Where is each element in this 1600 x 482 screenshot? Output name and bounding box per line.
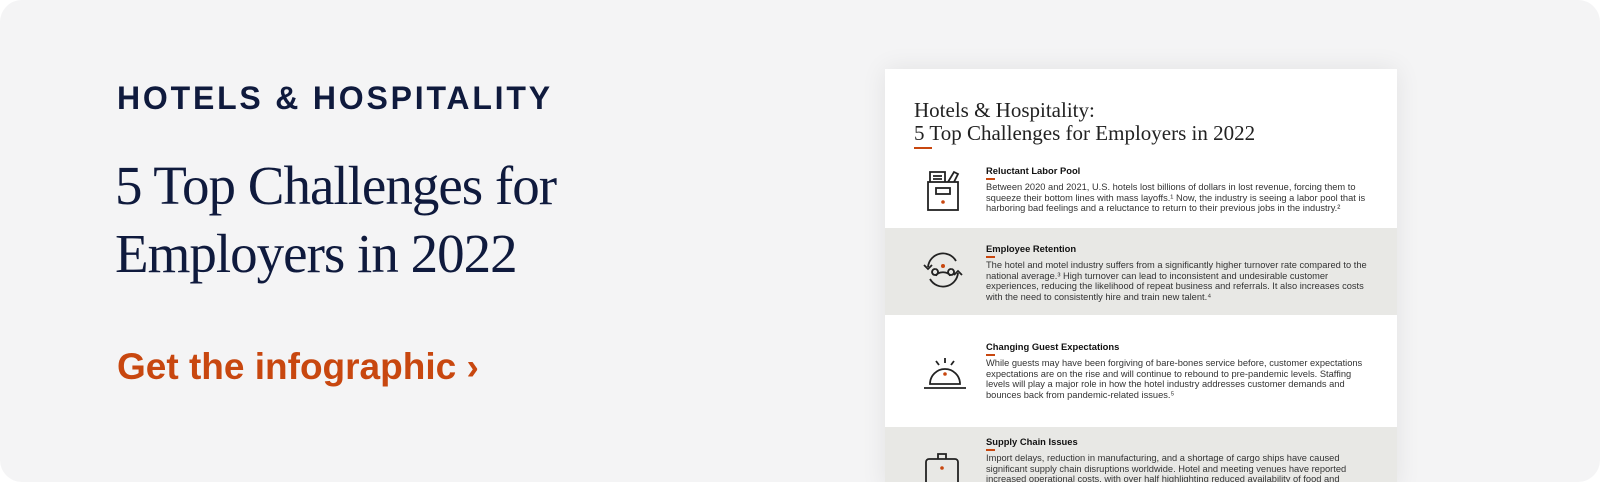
item: changing guest expectations: While guests may have been forgiving of bare-bones service before, customer expectations expectations are on the rise and will continue to rebound to pre-pandemic levels. Staffing levels will play a major role in how the hotel industry addresses customer demands and bounces back from pandemic-related issues.⁵ xyxy=(986,358,1362,400)
item: changing guest expectations: Changing Guest Expectations xyxy=(986,341,1119,352)
item: supply chain issues: Supply Chain Issues xyxy=(986,436,1078,447)
icon: suitcase xyxy=(925,453,959,482)
main title: 5 Top Challenges for xyxy=(115,155,556,216)
icon: box of files xyxy=(927,170,960,211)
main title: Employers in 2022 xyxy=(115,223,517,284)
call to action link: Get the infographic › xyxy=(117,346,479,387)
kicker heading: HOTELS & HOSPITALITY xyxy=(117,80,553,116)
item: employee retention xyxy=(986,243,1367,302)
infographic preview card xyxy=(885,69,1397,482)
item: reluctant labor pool xyxy=(986,165,1365,213)
icon: retention cycle xyxy=(923,252,963,288)
item: changing guest expectations xyxy=(986,341,1362,400)
item: reluctant labor pool: Reluctant Labor Pool xyxy=(986,165,1080,176)
icon: service bell xyxy=(924,358,966,389)
item: employee retention: The hotel and motel industry suffers from a significantly higher turnover rate compared to the national average.³ High turnover can lead to inconsistent and undesirable customer experiences, reducing the likelihood of repeat business and referrals. It also increases costs with the need to consistently hire and train new talent.⁴ xyxy=(986,260,1367,302)
card title: Hotels & Hospitality: xyxy=(914,98,1095,122)
item: reluctant labor pool: Between 2020 and 2021, U.S. hotels lost billions of dollars in lost revenue, forcing them to squeeze their bottom lines with mass layoffs.¹ Now, the industry is seeing a labor pool that is harboring bad feelings and a reluctance to return to their previous jobs in the industry.² xyxy=(986,182,1365,213)
item: employee retention: Employee Retention xyxy=(986,243,1076,254)
item: supply chain issues xyxy=(986,436,1346,482)
card title: 5 Top Challenges for Employers in 2022 xyxy=(914,121,1255,145)
card title xyxy=(914,98,1255,145)
main title xyxy=(115,155,557,284)
